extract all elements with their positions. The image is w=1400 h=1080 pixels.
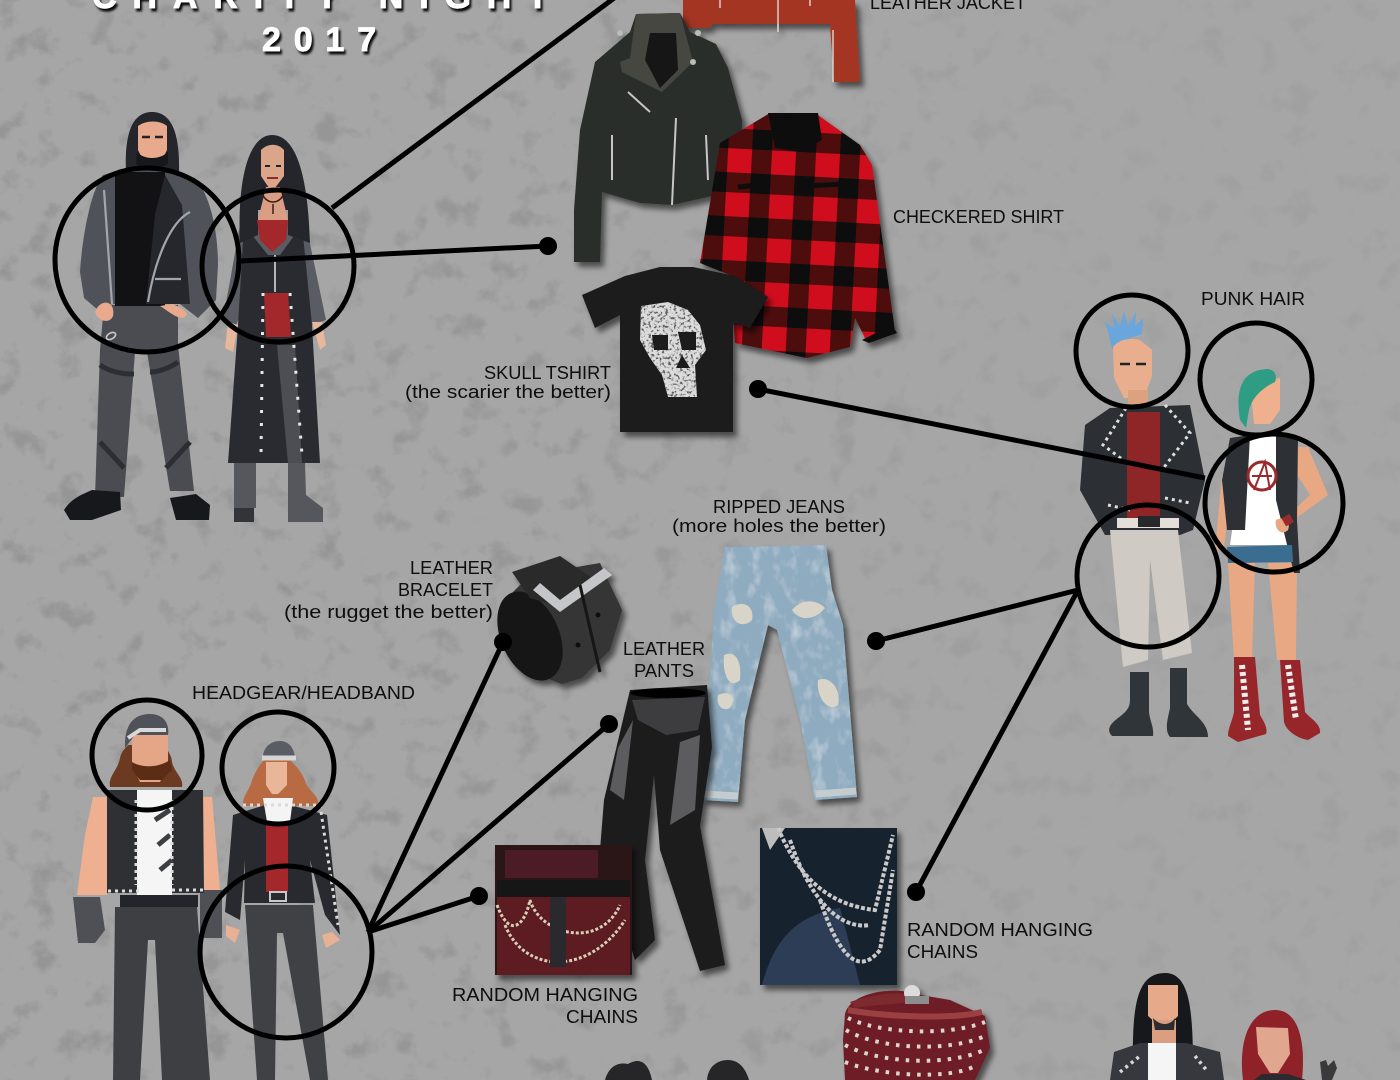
garment: red leather jacket	[683, 0, 860, 82]
callout ring: grey jacket	[55, 168, 239, 352]
callout ring: biker man headgear	[92, 700, 202, 810]
garment: wallet chains on dark jeans	[760, 828, 897, 985]
figure: biker woman with goggles	[225, 741, 340, 1080]
label: random hanging chains, left: RANDOM HANGING	[452, 985, 638, 1005]
figure: biker man with goggles	[73, 714, 222, 1080]
label: checkered shirt: CHECKERED SHIRT	[893, 207, 1064, 227]
label: ripped jeans	[672, 497, 886, 536]
garment: ripped jeans	[702, 545, 857, 802]
connector: skull tshirt to punk vest	[749, 380, 1205, 478]
label: random hanging chains, left	[452, 985, 638, 1027]
figure: metal man in grey jacket	[64, 112, 218, 520]
figure: punk man with blue mohawk	[1080, 311, 1208, 737]
connectors: pants ring to bracelet, leather pants, chains	[368, 633, 618, 932]
connector: coat ring to jackets	[332, 0, 625, 208]
garment: leather pants	[600, 685, 725, 971]
figure: punk woman with green hair	[1215, 369, 1328, 742]
label: skull tshirt: SKULL TSHIRT	[484, 363, 611, 383]
garment: leather bracelet	[484, 556, 622, 691]
callout ring: biker woman headgear	[222, 712, 334, 824]
callout ring: punk man pants	[1077, 505, 1219, 647]
title: charity night 2017: 2017	[262, 21, 376, 59]
label: leather bracelet: (the rugget the better)	[284, 602, 493, 622]
garment: waist chains on red skirt	[495, 845, 632, 975]
connector: pants ring to hanging chains	[907, 590, 1078, 901]
label: leather pants: LEATHER	[623, 639, 705, 659]
figure: long-haired man, lower right	[1110, 973, 1224, 1080]
label: random hanging chains, right	[907, 920, 1093, 962]
label: headgear/headband: HEADGEAR/HEADBAND	[192, 683, 415, 703]
label: random hanging chains, right: CHAINS	[907, 942, 978, 962]
label: random hanging chains, left: CHAINS	[566, 1007, 638, 1027]
connector: jacket ring to checkered shirt with dot	[240, 237, 557, 261]
garment: skull t-shirt	[582, 267, 768, 432]
label: leather bracelet: BRACELET	[398, 580, 493, 600]
label: skull tshirt: (the scarier the better)	[405, 382, 611, 402]
garment: black leather jacket	[574, 13, 742, 262]
label: leather pants	[623, 639, 705, 681]
figure: goth woman in long coat	[223, 135, 326, 522]
callout ring: goth coat	[202, 190, 354, 342]
connector: pants ring to ripped jeans	[867, 590, 1078, 650]
label: skull tshirt	[405, 363, 611, 402]
callout ring: punk woman hair	[1200, 323, 1312, 435]
label: punk hair: PUNK HAIR	[1201, 289, 1305, 309]
label: leather bracelet	[284, 558, 493, 622]
label: random hanging chains, right: RANDOM HANGING	[907, 920, 1093, 940]
garment: studded red wrap bracelet	[843, 985, 990, 1080]
title: charity night 2017	[92, 0, 548, 59]
label: ripped jeans: (more holes the better)	[672, 516, 886, 536]
garment: leather boots, cropped at bottom	[605, 1060, 749, 1080]
callout ring: punk man hair	[1076, 295, 1188, 407]
label: leather bracelet: LEATHER	[410, 558, 493, 578]
callout ring: biker woman pants	[200, 866, 372, 1038]
label: leather pants: PANTS	[634, 661, 694, 681]
label: ripped jeans: RIPPED JEANS	[713, 497, 845, 517]
callout ring: punk woman vest	[1205, 434, 1343, 572]
garment: red checkered shirt	[700, 113, 897, 358]
figure: red-haired woman, lower right	[1242, 1010, 1337, 1080]
